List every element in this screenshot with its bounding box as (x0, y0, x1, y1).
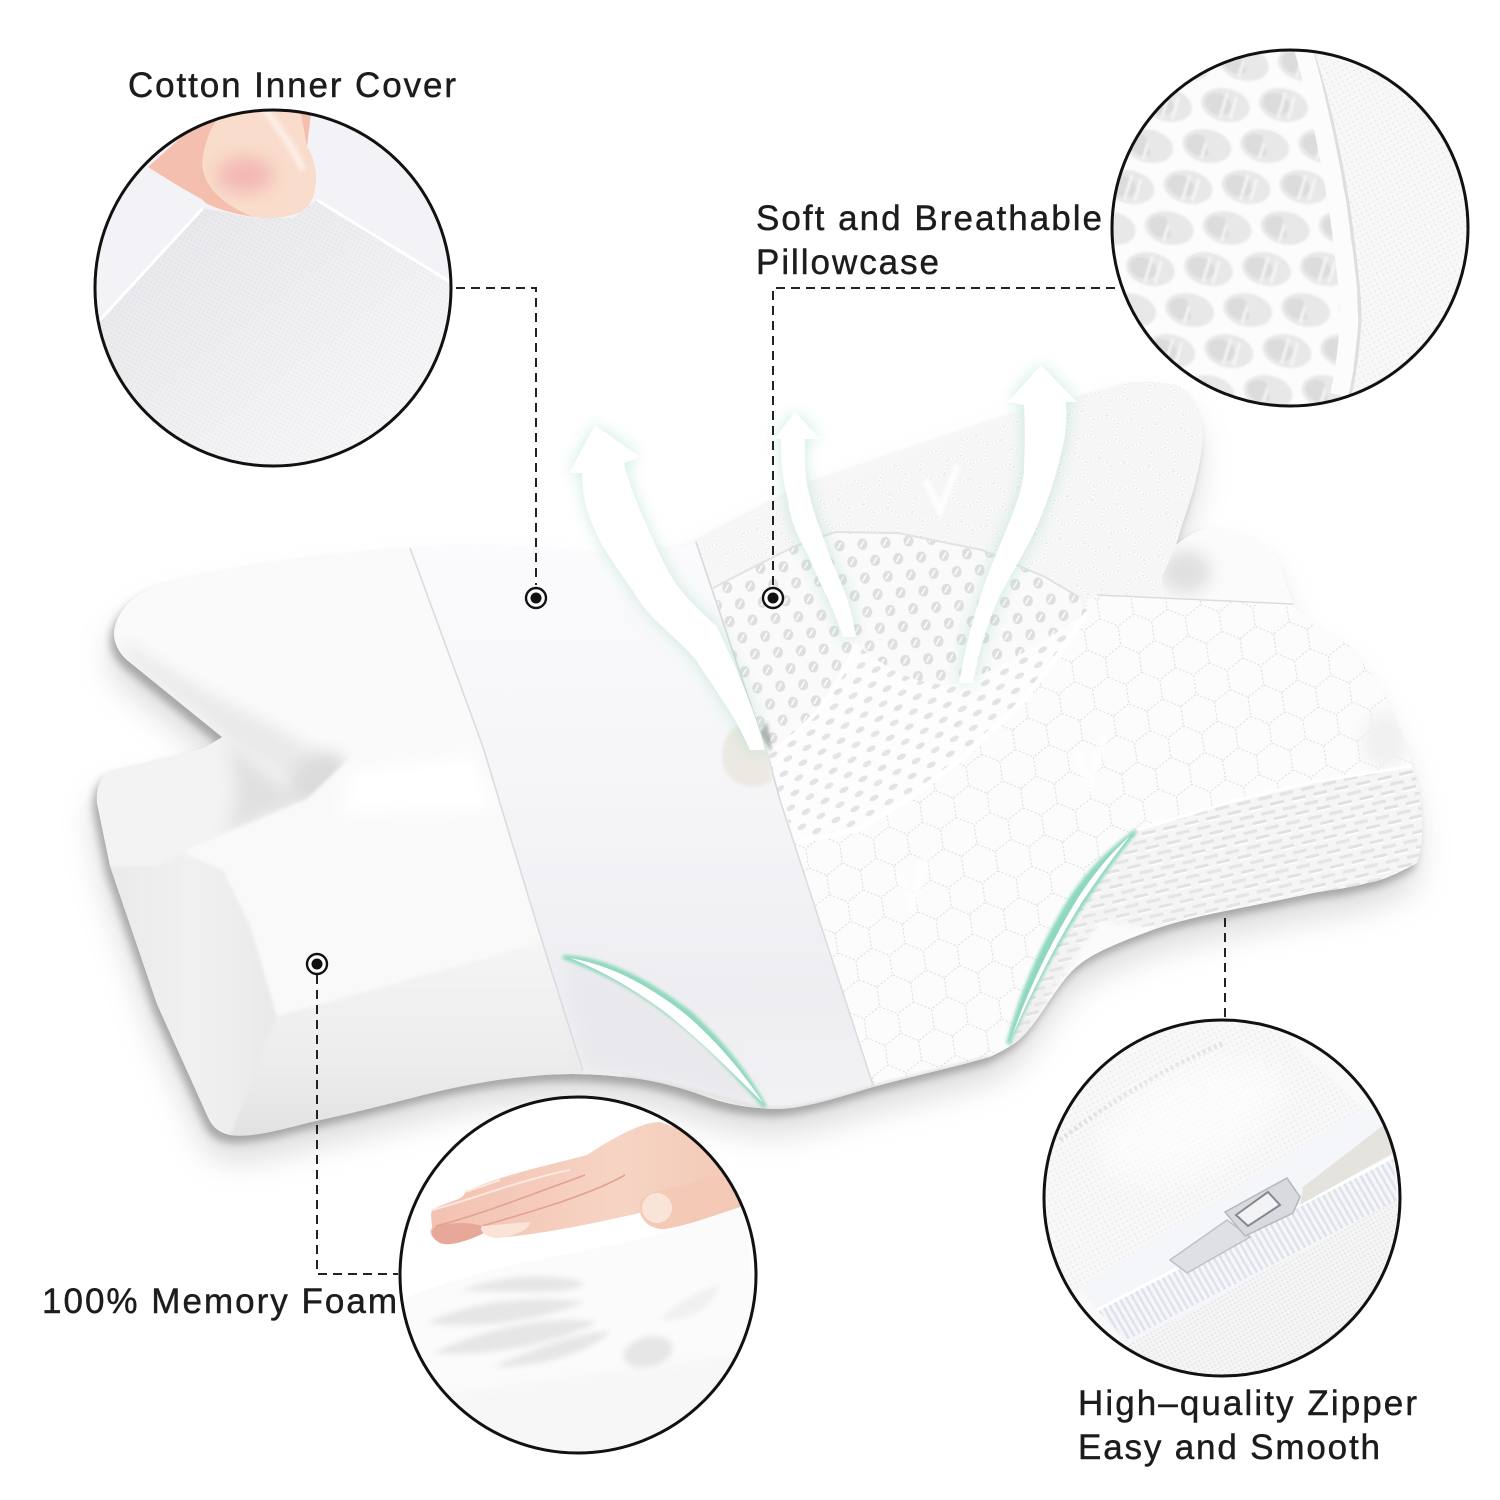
pillow base (96, 414, 1415, 1136)
back peak with honeycomb knit (698, 382, 1202, 610)
label: memory foam: 100% Memory Foam (42, 1282, 397, 1321)
green curve: right side (1008, 831, 1136, 1044)
left outer face (90, 852, 277, 1150)
smooth fabric panel (1316, 54, 1466, 392)
upper lobe (114, 614, 212, 729)
zipper slider (1170, 1178, 1300, 1273)
front top plane (183, 747, 547, 1016)
circle: cotton inner cover (90, 105, 460, 480)
zipper tape and teeth (1080, 1107, 1397, 1345)
floor shadow under pillow (93, 389, 1418, 1160)
label: soft and breathable pillowcase: Pillowcase (756, 243, 939, 282)
label: zipper (1078, 1384, 1417, 1467)
right back lobe (1162, 542, 1210, 594)
leader: memory foam (307, 954, 398, 1274)
leader: pillowcase (763, 288, 1115, 608)
label: zipper: Easy and Smooth (1078, 1428, 1380, 1467)
white band (410, 542, 873, 1109)
foam surface (395, 1205, 770, 1460)
foam core dimple (722, 725, 772, 787)
channel floor (96, 789, 110, 866)
bottom face (232, 1030, 583, 1136)
green curve: band (563, 957, 765, 1107)
leader: zipper (1224, 918, 1226, 1020)
right side wall with ribbed knit (1007, 765, 1440, 1055)
velour left section (96, 614, 583, 1136)
mesh panel (713, 532, 1087, 842)
arrow: airflow middle (774, 412, 856, 637)
right honeycomb front face (780, 465, 1440, 1090)
arrow: airflow left (569, 425, 765, 750)
hand impressions (427, 1276, 720, 1373)
label: zipper: High–quality Zipper (1078, 1384, 1417, 1423)
label: cotton inner cover: Cotton Inner Cover (128, 66, 456, 105)
lower fabric (1127, 1200, 1410, 1385)
label: soft and breathable pillowcase (756, 199, 1102, 282)
arrow: airflow right (959, 365, 1077, 683)
circle: zipper (1040, 1015, 1410, 1385)
fabric (100, 199, 450, 464)
hand (430, 1122, 745, 1244)
fingertip (148, 105, 316, 218)
bottom rim highlight (623, 1057, 990, 1109)
circle: memory foam hand print (395, 1095, 770, 1465)
label: soft and breathable pillowcase: Soft and Breathable (756, 199, 1102, 238)
circle: breathable pillowcase mesh (1105, 45, 1480, 415)
leader: cotton inner cover (456, 288, 546, 608)
pillow (80, 370, 1440, 1150)
